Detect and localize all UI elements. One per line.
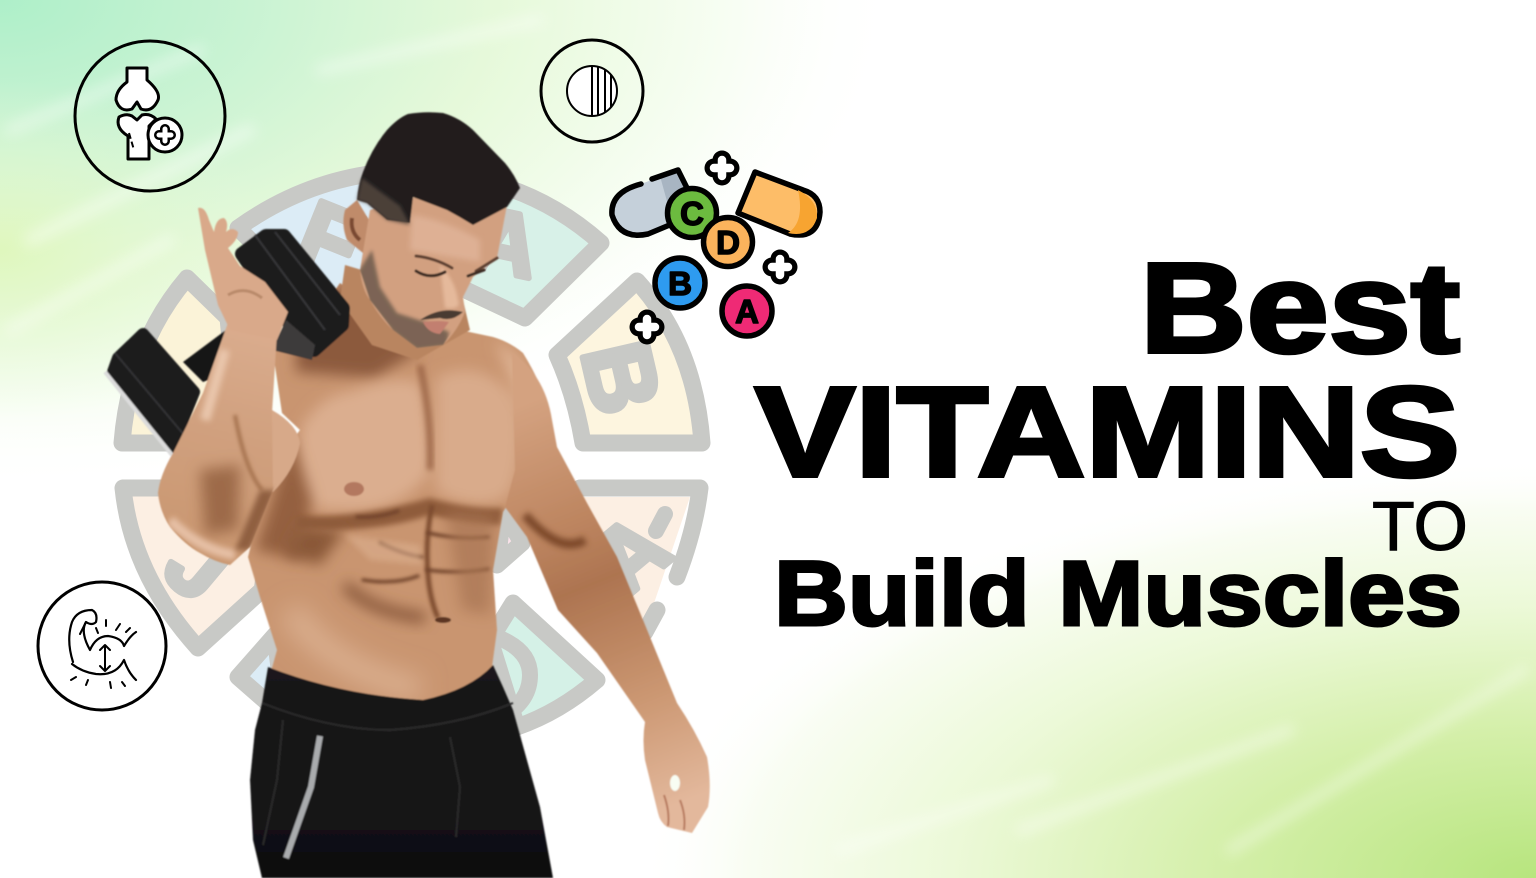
vitamin A badge — [722, 286, 772, 336]
left upper arm — [250, 410, 300, 492]
letter A top: A — [465, 187, 548, 297]
wheel segment: upper left yellow — [122, 278, 240, 443]
right arm shading — [525, 515, 585, 544]
man with dumbbell — [105, 112, 710, 878]
icon: knee joint — [75, 41, 225, 191]
vitamin D badge: D — [716, 224, 740, 261]
wheel letters — [146, 181, 688, 621]
finger gap — [670, 775, 680, 791]
plus signs — [639, 160, 788, 335]
dumbbell lower plates — [113, 334, 194, 447]
dumbbell handle — [183, 330, 235, 382]
icon: half striped circle — [541, 40, 643, 142]
letter F: F — [284, 181, 375, 297]
wheel segment: A top — [418, 172, 601, 318]
wheel segment: D — [490, 603, 597, 727]
title line: TO: TO — [1372, 487, 1468, 565]
neck — [340, 265, 470, 360]
wheel letter accents — [497, 514, 665, 715]
dumbbell upper plates — [242, 236, 343, 350]
letter A right: A — [574, 495, 688, 614]
icon: flexed bicep — [38, 582, 166, 710]
vitamin B badge: B — [668, 265, 692, 302]
wheel segment: A right — [580, 488, 700, 632]
wheel segment: B — [557, 281, 702, 443]
dumbbell — [105, 232, 343, 455]
nipple — [344, 482, 364, 496]
letter B: B — [561, 332, 680, 423]
capsule: grey — [612, 170, 690, 235]
capsule: orange — [738, 172, 820, 235]
letter J: J — [146, 513, 249, 621]
hair — [357, 112, 520, 225]
title — [755, 237, 1468, 645]
face — [358, 190, 507, 350]
dumbbell hub — [272, 320, 315, 360]
pocket zip — [286, 736, 320, 858]
hand — [198, 208, 288, 340]
navel — [435, 617, 451, 623]
vitamin A badge: A — [735, 293, 759, 330]
ear — [343, 200, 372, 253]
wheel segment: J — [123, 488, 280, 648]
wheel segment: F — [238, 172, 400, 340]
vitamin wheel watermark — [122, 172, 702, 727]
pants — [250, 665, 553, 878]
torso — [248, 283, 553, 710]
left forearm — [158, 313, 287, 565]
pants seams — [263, 720, 460, 845]
moustache — [420, 310, 463, 320]
vitamin C badge — [668, 188, 716, 238]
hair fade — [357, 178, 410, 225]
icon: vitamin capsules — [612, 160, 820, 336]
vitamin C badge: C — [680, 195, 704, 232]
eyebrows — [416, 256, 497, 271]
eyes — [416, 270, 484, 276]
waistband seam — [262, 703, 513, 730]
wheel segment: centre pink — [497, 510, 522, 565]
vitamin B badge — [655, 258, 705, 308]
vitamin D badge — [704, 218, 752, 266]
mouth — [423, 321, 449, 334]
title line: Build Muscles: Build Muscles — [774, 543, 1462, 645]
title line: Best: Best — [1140, 237, 1460, 380]
wheel segment: lower left blue — [238, 635, 285, 718]
right arm — [505, 353, 710, 833]
title line: VITAMINS: VITAMINS — [755, 361, 1460, 504]
